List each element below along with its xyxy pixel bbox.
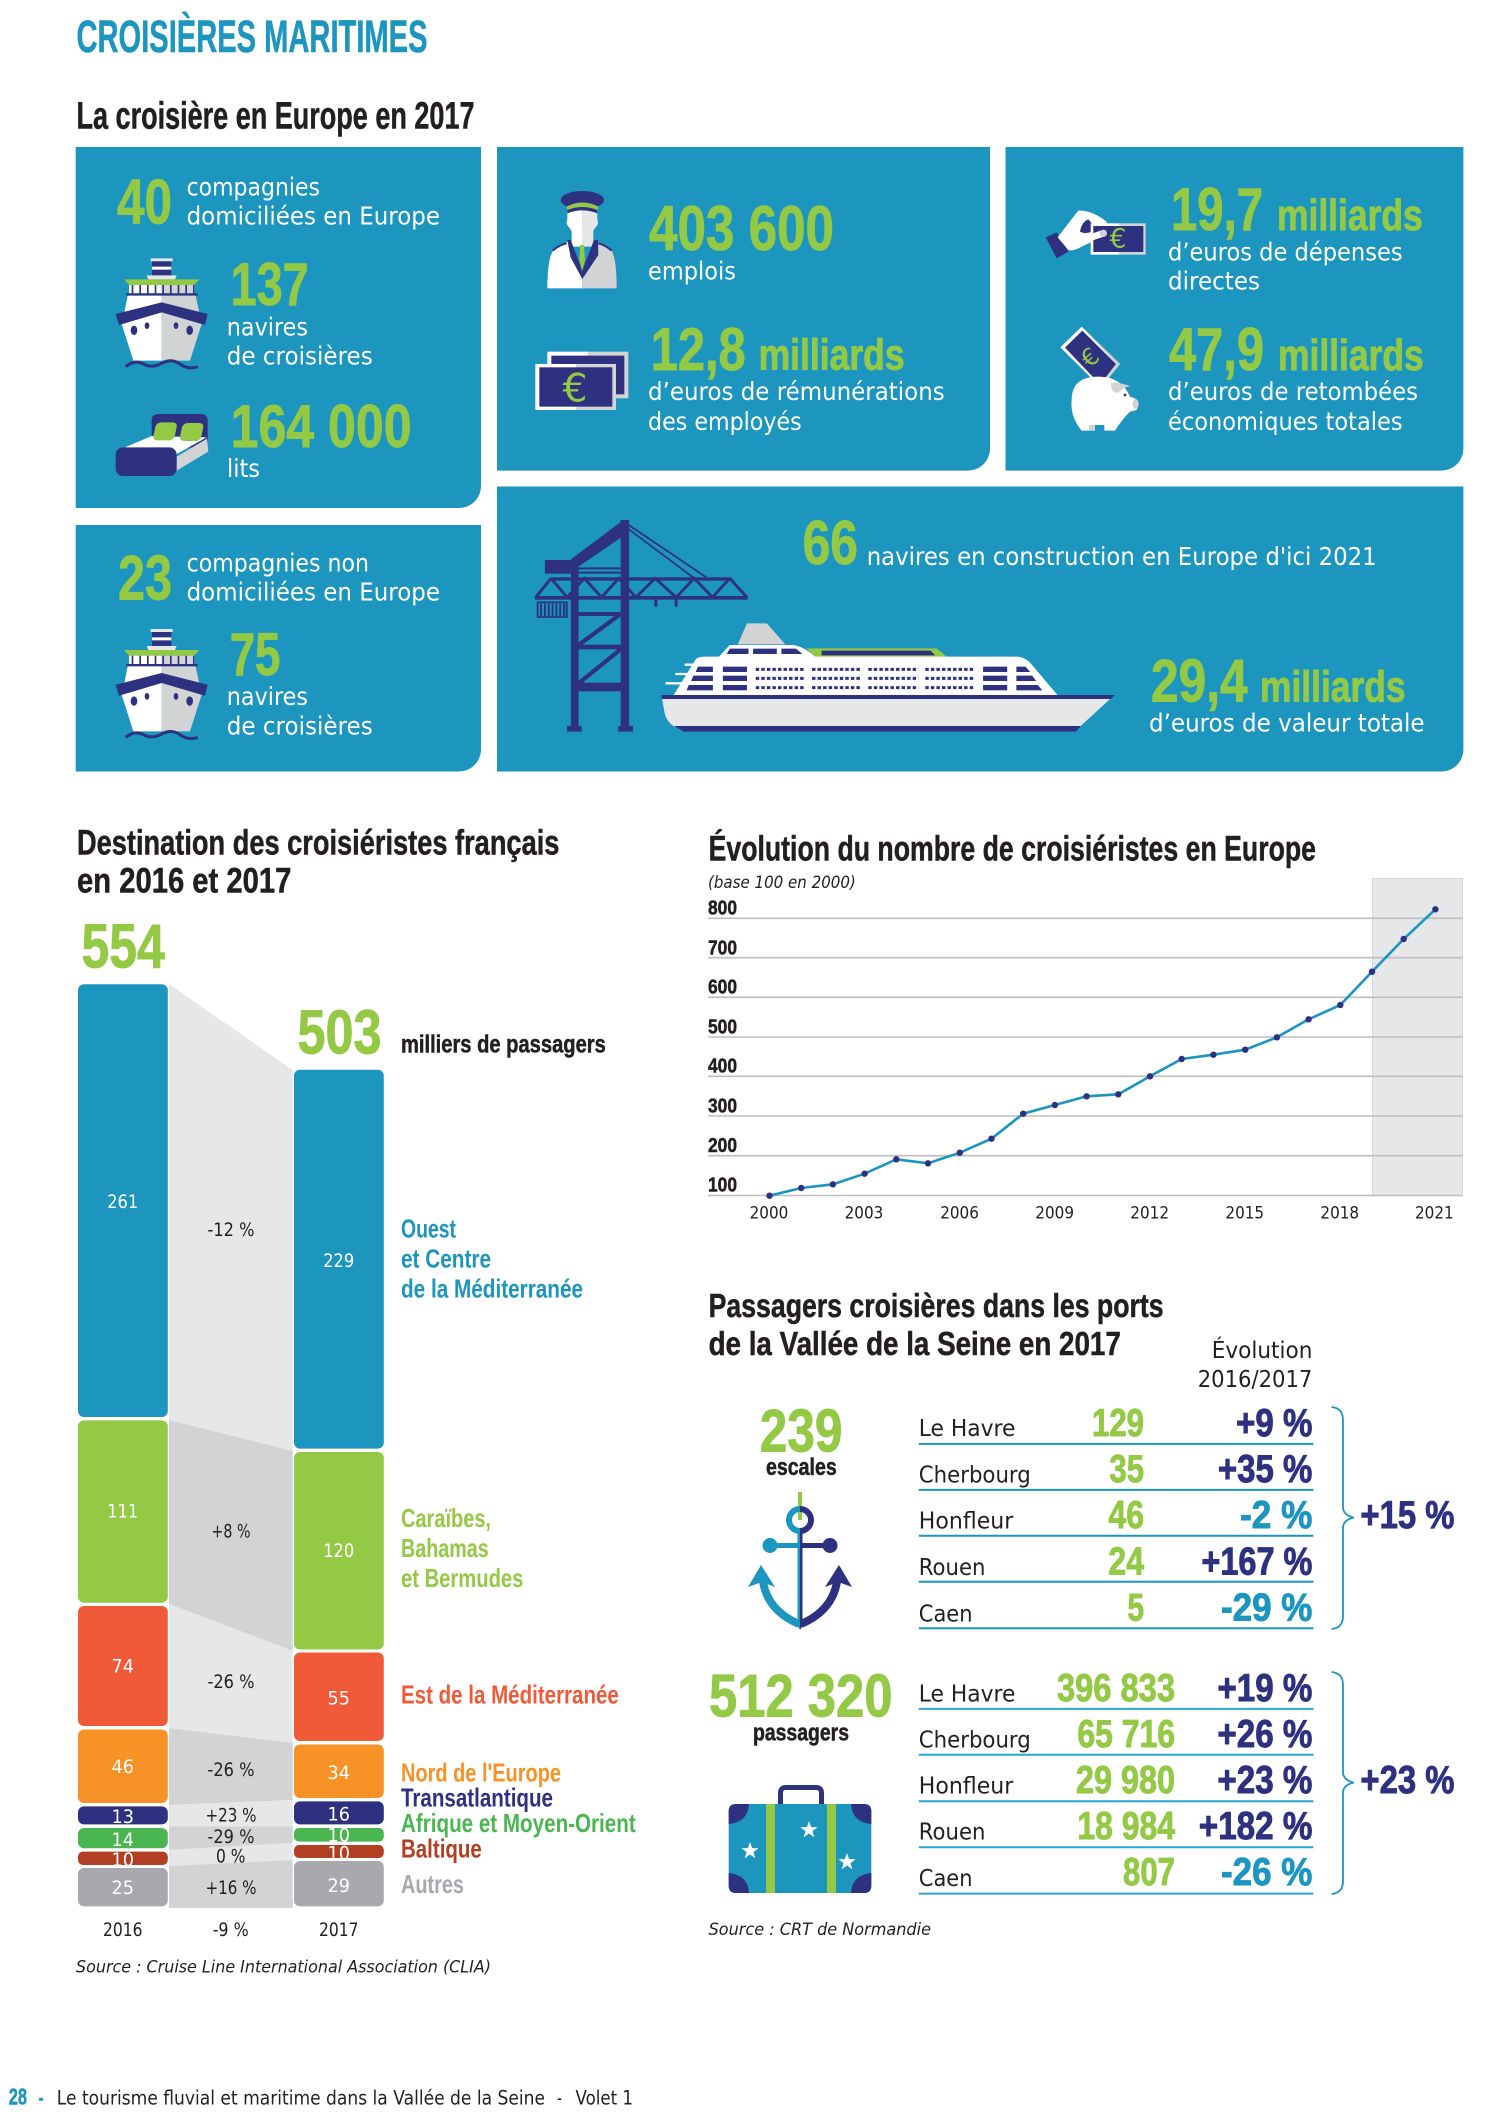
bar values: 13 — [112, 1806, 134, 1828]
bar values: 120 — [323, 1540, 354, 1562]
table: escales: 24 — [1108, 1540, 1144, 1583]
panel: emplois et rémunérations: milliards — [759, 330, 905, 380]
destination legend — [401, 1214, 636, 1899]
heading: passagers croisières: Passagers croisières dans les ports — [709, 1287, 1164, 1324]
destination legend: Afrique et Moyen-Orient — [401, 1808, 636, 1838]
bar values: 34 — [328, 1762, 350, 1784]
panel: compagnies domiciliées: navires — [227, 312, 308, 342]
panel: dépenses et retombées: économiques totales — [1168, 407, 1403, 436]
heading: destination des croisiéristes: Destination des croisiéristes français — [77, 824, 559, 863]
table: passagers: Le Havre — [919, 1682, 1015, 1708]
chart: destinations stacked bars — [78, 912, 636, 1941]
subheading: base 100: (base 100 en 2000) — [708, 873, 856, 893]
panel: navires en construction: 66 — [803, 509, 858, 578]
axis labels: -9 % — [213, 1919, 249, 1941]
bar values: 10 — [328, 1825, 350, 1847]
destination legend: Bahamas — [401, 1533, 489, 1563]
bar values: 16 — [328, 1804, 350, 1826]
panel: emplois et rémunérations: d’euros de rémunérations — [648, 377, 945, 406]
bar values: 25 — [112, 1877, 134, 1899]
bar values: 229 — [323, 1250, 354, 1272]
table: passagers: +19 % — [1217, 1667, 1312, 1710]
icon: ship front — [116, 629, 208, 739]
connecting bands — [169, 984, 293, 1908]
icon: port crane — [535, 520, 748, 732]
table: escales: Rouen — [919, 1555, 985, 1581]
panel: compagnies domiciliées: compagnies — [187, 172, 320, 202]
panel: compagnies domiciliées — [76, 147, 481, 508]
panel: dépenses et retombées: 19,7 — [1171, 176, 1263, 243]
table: escales: Cherbourg — [919, 1462, 1031, 1488]
table: passagers: 396 833 — [1057, 1667, 1175, 1710]
panel: compagnies non domiciliées: 23 — [118, 544, 172, 614]
footer: Volet 1 — [576, 2086, 633, 2109]
bar values: 14 — [112, 1829, 134, 1851]
panel: compagnies domiciliées: de croisières — [227, 342, 373, 371]
panel: passagers — [709, 1663, 1454, 1894]
x axis labels — [750, 1204, 1454, 1224]
y axis labels: 100 — [708, 1175, 737, 1197]
panel: compagnies non domiciliées: navires — [227, 682, 308, 711]
bar values — [107, 1191, 354, 1899]
panel: compagnies domiciliées: domiciliées en Europe — [187, 202, 440, 231]
variation percentages: +16 % — [206, 1877, 256, 1899]
table: escales: 5 — [1128, 1586, 1144, 1629]
table: escales: 46 — [1108, 1494, 1144, 1537]
destination legend: Nord de l'Europe — [401, 1757, 561, 1787]
x axis labels: 2012 — [1130, 1204, 1169, 1224]
panel: dépenses et retombées: d’euros de retombées — [1168, 377, 1418, 406]
bar values: 10 — [112, 1849, 134, 1871]
icon: cruise ship — [661, 623, 1115, 732]
table: escales — [919, 1402, 1313, 1629]
panel: compagnies non domiciliées: compagnies non — [187, 548, 369, 577]
table: passagers — [919, 1667, 1313, 1894]
heading: destination des croisiéristes: en 2016 et 2017 — [77, 862, 291, 901]
panel: passagers: 512 320 — [709, 1663, 892, 1730]
x axis labels: 2006 — [940, 1204, 979, 1224]
panel: escales: 239 — [760, 1397, 842, 1464]
footer: - — [557, 2086, 562, 2109]
bar values: 29 — [328, 1875, 350, 1897]
icon: ship front — [116, 258, 208, 368]
panel: dépenses et retombées: milliards — [1278, 331, 1424, 380]
table: escales: 35 — [1109, 1448, 1144, 1491]
destination legend: Autres — [401, 1869, 464, 1899]
panel: emplois et rémunérations: 403 600 — [649, 194, 834, 264]
x axis labels: 2021 — [1415, 1204, 1454, 1224]
panel: escales: escales — [766, 1454, 837, 1481]
icon: banknotes: € — [562, 367, 588, 412]
column heading: évolution: 2016/2017 — [1198, 1367, 1312, 1393]
column heading: évolution: Évolution — [1212, 1336, 1312, 1364]
panel: escales — [748, 1397, 1454, 1630]
destination legend: Est de la Méditerranée — [401, 1680, 619, 1710]
table: passagers: 807 — [1123, 1851, 1175, 1894]
destination legend: et Centre — [401, 1244, 491, 1274]
icon: hand with banknote: € — [1110, 224, 1126, 255]
footer: - — [38, 2087, 44, 2109]
footer: 28 — [9, 2083, 27, 2109]
brace: escales total: +15 % — [1360, 1494, 1454, 1537]
table: passagers: +26 % — [1217, 1713, 1312, 1756]
panel: navires en construction: milliards — [1260, 663, 1406, 712]
panel: dépenses et retombées: d’euros de dépenses — [1168, 238, 1403, 267]
panel: navires en construction: 29,4 — [1151, 648, 1248, 715]
table: passagers: Cherbourg — [919, 1728, 1031, 1754]
bar values: 74 — [112, 1656, 134, 1678]
x axis labels: 2018 — [1320, 1204, 1359, 1224]
data points — [766, 906, 1439, 1199]
table: escales: Honfleur — [919, 1508, 1014, 1534]
x axis labels: 2000 — [750, 1204, 788, 1224]
variation percentages: -12 % — [208, 1219, 254, 1241]
table: escales: 129 — [1092, 1402, 1144, 1445]
y axis labels: 700 — [708, 937, 737, 959]
icon: piggy bank with banknote: € — [1075, 342, 1105, 373]
table: passagers: -26 % — [1221, 1851, 1312, 1894]
panel: dépenses et retombées: milliards — [1277, 191, 1423, 240]
total 2016: 554 — [82, 912, 165, 982]
destination legend: Caraïbes, — [401, 1503, 491, 1533]
x axis labels: 2003 — [845, 1204, 883, 1224]
axis labels — [103, 1919, 358, 1941]
table: passagers: Rouen — [919, 1819, 985, 1845]
icon: hand with banknote — [1046, 211, 1146, 258]
heading: passagers croisières — [709, 1287, 1164, 1362]
x axis labels: 2015 — [1225, 1204, 1264, 1224]
y axis labels: 800 — [708, 898, 737, 920]
panel: compagnies non domiciliées: domiciliées en Europe — [187, 578, 440, 606]
table: escales: -2 % — [1240, 1494, 1312, 1537]
heading: destination des croisiéristes — [77, 824, 559, 901]
variation percentages: -26 % — [208, 1671, 254, 1693]
panel: emplois et rémunérations: emplois — [648, 257, 736, 286]
brace: passagers total — [1332, 1672, 1454, 1894]
icon: suitcase — [729, 1788, 871, 1893]
panel: emplois et rémunérations — [497, 147, 990, 471]
panel: dépenses et retombées — [1006, 147, 1463, 471]
icon: piggy bank with banknote — [1060, 327, 1139, 431]
brace: passagers total: +23 % — [1360, 1759, 1454, 1802]
data line — [770, 909, 1435, 1196]
y axis labels: 200 — [708, 1135, 737, 1157]
destination legend: Ouest — [401, 1214, 456, 1244]
variation percentages: 0 % — [216, 1846, 246, 1868]
panel: compagnies domiciliées: lits — [227, 454, 260, 483]
title: CROISIÈRES MARITIMES — [76, 11, 428, 62]
heading: évolution: Évolution du nombre de croisiéristes en Europe — [709, 829, 1316, 869]
footer: Le tourisme fluvial et maritime dans la Vallée de la Seine — [57, 2086, 545, 2109]
x axis labels: 2009 — [1035, 1204, 1074, 1224]
icon: ship officer — [547, 191, 617, 288]
panel: passagers: passagers — [753, 1720, 849, 1746]
variation percentages: -26 % — [208, 1759, 254, 1781]
panel: compagnies non domiciliées — [76, 525, 481, 772]
bars 2017 — [294, 1070, 384, 1906]
panel: emplois et rémunérations: des employés — [648, 407, 802, 436]
bar values: 111 — [107, 1500, 138, 1522]
total 2017: 503 — [298, 998, 382, 1067]
table: passagers: +182 % — [1199, 1805, 1312, 1848]
bar values: 55 — [328, 1687, 350, 1709]
axis labels: 2016 — [103, 1919, 142, 1941]
chart: line evolution — [708, 878, 1463, 1224]
bar values: 261 — [107, 1191, 138, 1213]
forecast shaded zone — [1372, 878, 1463, 1196]
y axis labels: 400 — [708, 1056, 737, 1078]
bar values: 46 — [112, 1756, 134, 1778]
table: passagers: Honfleur — [919, 1773, 1014, 1799]
y axis labels: 600 — [708, 977, 737, 999]
table: passagers: 18 984 — [1077, 1805, 1175, 1848]
brace: escales total — [1332, 1407, 1454, 1629]
bars 2016 — [78, 984, 168, 1906]
table: escales: +9 % — [1236, 1402, 1312, 1445]
destination legend: et Bermudes — [401, 1563, 523, 1593]
panel: navires en construction — [497, 486, 1463, 772]
panel: navires en construction: navires en construction en Europe d'ici 2021 — [867, 542, 1377, 571]
heading: la croisière en Europe: La croisière en Europe en 2017 — [76, 96, 474, 138]
destination legend: de la Méditerranée — [401, 1274, 583, 1304]
panel: dépenses et retombées: 47,9 — [1169, 316, 1264, 383]
panel: compagnies domiciliées: 164 000 — [231, 393, 412, 460]
destination legend: Baltique — [401, 1834, 482, 1864]
table: passagers: 29 980 — [1076, 1759, 1175, 1802]
source: CRT: Source : CRT de Normandie — [709, 1920, 931, 1940]
variation percentages: +8 % — [212, 1520, 250, 1542]
y axis labels: 300 — [708, 1095, 737, 1117]
table: escales: +35 % — [1218, 1448, 1312, 1491]
table: passagers: Caen — [919, 1866, 972, 1892]
icon: anchor — [748, 1492, 852, 1630]
icon: bed — [116, 414, 208, 476]
table: escales: +167 % — [1201, 1540, 1312, 1583]
column heading: évolution — [1198, 1336, 1312, 1393]
table: passagers: 65 716 — [1077, 1713, 1175, 1756]
variation percentages: -29 % — [208, 1826, 254, 1848]
unit label: milliers de passagers — [401, 1030, 606, 1058]
panel: compagnies domiciliées: 40 — [117, 168, 172, 238]
destination legend: Transatlantique — [401, 1782, 553, 1812]
panel: compagnies non domiciliées: de croisières — [227, 712, 373, 740]
table: passagers: +23 % — [1217, 1759, 1312, 1802]
y axis labels — [708, 898, 737, 1197]
bar values: 10 — [328, 1843, 350, 1865]
table: escales: -29 % — [1221, 1586, 1312, 1629]
table: escales: Le Havre — [919, 1416, 1015, 1442]
panel: compagnies non domiciliées: 75 — [230, 621, 280, 688]
icon: banknotes — [535, 352, 628, 412]
panel: navires en construction: d’euros de valeur totale — [1149, 709, 1425, 738]
panel: compagnies domiciliées: 137 — [231, 251, 309, 318]
axis labels: 2017 — [319, 1919, 358, 1941]
heading: passagers croisières: de la Vallée de la Seine en 2017 — [709, 1325, 1121, 1362]
table: escales: Caen — [919, 1601, 972, 1627]
panel: dépenses et retombées: directes — [1168, 267, 1260, 296]
variation percentages: +23 % — [206, 1804, 256, 1826]
y axis labels: 500 — [708, 1016, 737, 1038]
panel: emplois et rémunérations: 12,8 — [651, 316, 746, 383]
variation percentages — [206, 1219, 256, 1899]
source: CLIA: Source : Cruise Line International Association (CLIA) — [76, 1958, 491, 1978]
